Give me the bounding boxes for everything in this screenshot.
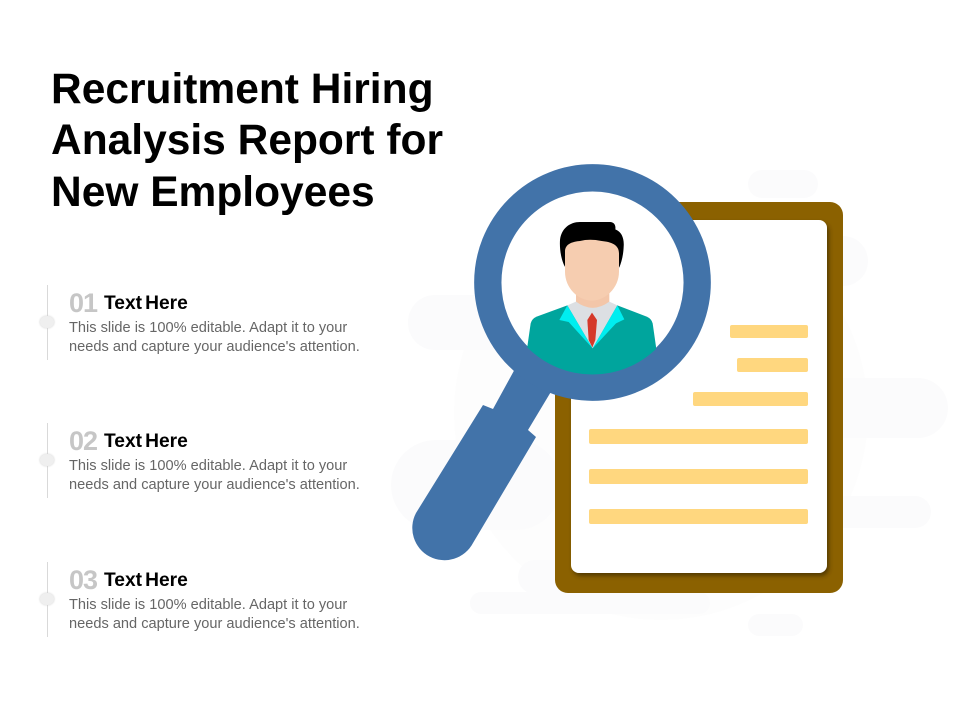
title: Analysis Report for xyxy=(51,117,443,164)
item 03: Text Here xyxy=(104,570,188,590)
item 01: 01 xyxy=(69,288,97,318)
magnifier lens xyxy=(488,178,697,387)
suit xyxy=(527,305,657,380)
item 02: Text Here xyxy=(104,430,188,452)
paper sheet xyxy=(571,220,827,573)
magnifier handle xyxy=(412,367,552,560)
title: Recruitment Hiring xyxy=(51,66,434,112)
magnifier xyxy=(412,178,697,560)
item 02 xyxy=(39,423,360,498)
text bars xyxy=(589,325,808,524)
tie xyxy=(587,313,597,347)
item 02: 02 xyxy=(69,426,97,456)
item 01: Text Here xyxy=(104,292,188,314)
item 02: This slide is 100% editable. Adapt it to your xyxy=(69,458,347,474)
face xyxy=(565,240,619,301)
item 02: needs and capture your audience's attention. xyxy=(69,476,360,492)
background blobs xyxy=(391,170,948,636)
item 01 xyxy=(39,285,360,360)
lapels xyxy=(559,305,624,348)
person portrait xyxy=(527,222,657,380)
title xyxy=(51,66,443,216)
item 03 xyxy=(39,562,360,637)
item 03: This slide is 100% editable. Adapt it to your xyxy=(69,597,347,613)
item 01: needs and capture your audience's attention. xyxy=(69,338,360,354)
title: New Employees xyxy=(51,168,375,216)
item 03: needs and capture your audience's attention. xyxy=(69,616,360,632)
item 03: 03 xyxy=(69,565,97,595)
shirt xyxy=(567,302,617,348)
item 01: This slide is 100% editable. Adapt it to your xyxy=(69,320,347,336)
illustration xyxy=(412,164,843,593)
hair xyxy=(560,222,624,267)
clipboard xyxy=(555,202,843,593)
neck xyxy=(576,293,610,308)
